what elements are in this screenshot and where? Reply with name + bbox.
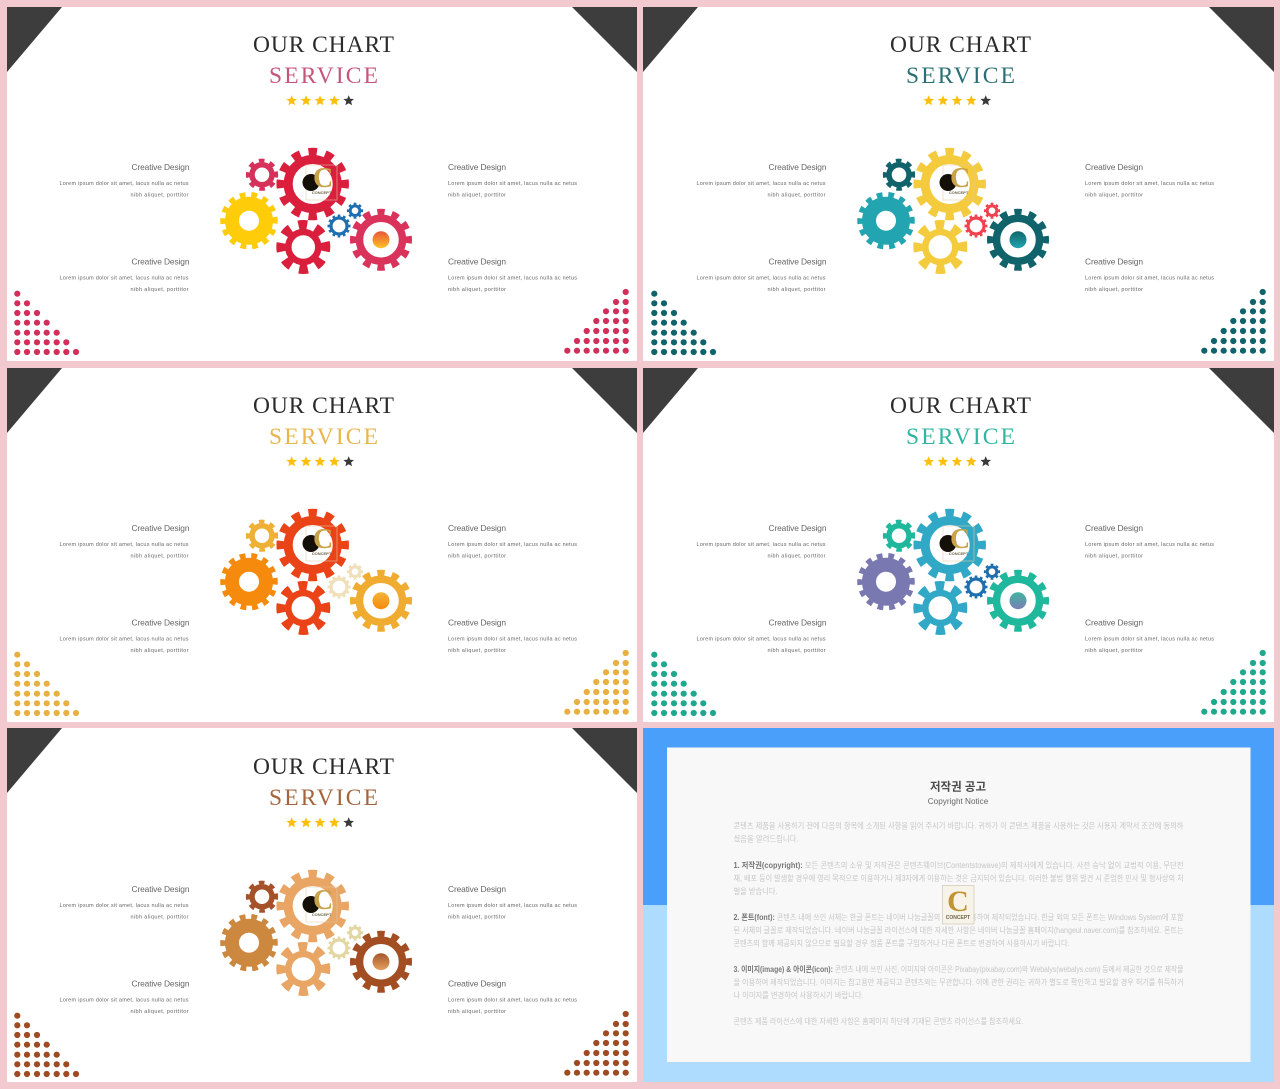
text block top right: nibh aliquet, porttitor [1085, 554, 1143, 560]
panel: orange service slide [7, 368, 637, 722]
text block bottom left: Lorem ipsum dolor sit amet, lacus nulla ac netus [60, 636, 189, 642]
text block top right [1085, 523, 1214, 560]
title: OUR CHART [890, 393, 1031, 419]
text block bottom left: nibh aliquet, porttitor [768, 287, 826, 293]
text block bottom left [60, 256, 190, 293]
corner triangle left [643, 7, 698, 72]
text block bottom right: nibh aliquet, porttitor [448, 1009, 506, 1015]
text block bottom right: Lorem ipsum dolor sit amet, lacus nulla ac netus [448, 998, 577, 1004]
paragraph 2 font [734, 912, 1184, 948]
text block bottom right: nibh aliquet, porttitor [448, 648, 506, 654]
text block bottom right [448, 978, 577, 1015]
panel: teal service slide [643, 7, 1274, 361]
dot triangle right [564, 1011, 629, 1076]
panel: aqua service slide [643, 368, 1274, 722]
paragraph 1 copyright [734, 860, 1184, 896]
corner triangle left [7, 7, 62, 72]
text block bottom right: Creative Design [448, 256, 506, 266]
text block bottom left [696, 256, 827, 293]
text block top right: Creative Design [1085, 162, 1143, 172]
text block bottom right [448, 256, 577, 293]
text block top right: Creative Design [448, 162, 506, 172]
corner triangle right [572, 7, 637, 72]
subtitle: SERVICE [269, 63, 378, 89]
text block bottom right: Creative Design [1085, 618, 1143, 628]
text block bottom right [1085, 618, 1214, 654]
corner triangle right [572, 368, 637, 433]
notice heading: 저작권 공고 [930, 780, 986, 794]
text block top left: Lorem ipsum dolor sit amet, lacus nulla ac netus [696, 181, 826, 187]
watermark logo [942, 885, 974, 924]
text block bottom left: nibh aliquet, porttitor [768, 648, 826, 654]
text block top left: nibh aliquet, porttitor [768, 554, 826, 560]
text block bottom left: Creative Design [132, 256, 190, 266]
text block top left: Creative Design [132, 884, 190, 894]
text block bottom left: Lorem ipsum dolor sit amet, lacus nulla ac netus [60, 276, 189, 282]
text block top left: Creative Design [768, 162, 827, 172]
star rating [923, 456, 991, 466]
corner triangle right [1209, 7, 1274, 72]
title: OUR CHART [253, 754, 394, 780]
text block bottom left [60, 978, 190, 1015]
text block bottom right: Lorem ipsum dolor sit amet, lacus nulla ac netus [448, 276, 577, 282]
text block top left: Lorem ipsum dolor sit amet, lacus nulla ac netus [696, 542, 826, 548]
text block top right: Lorem ipsum dolor sit amet, lacus nulla ac netus [448, 181, 577, 187]
title: OUR CHART [253, 393, 394, 419]
text block top left: nibh aliquet, porttitor [130, 914, 189, 920]
notice card [667, 748, 1250, 1062]
text block bottom left: Creative Design [132, 618, 190, 628]
paragraph 3 image and icon: 을 이용하여 제작되었습니다. 이미지는 참고용만 제공되고 콘텐츠와는 무관합니다. 이에 관한 권리는 귀하가 별도로 확인하고 필요할 경우 허가를 취득하거 [734, 977, 1184, 987]
dot triangle left [651, 652, 716, 716]
gear cluster [860, 512, 1046, 630]
paragraph 2 font: 콘텐츠의 함께 제공되지 않으므로 필요할 경우 정품 폰트를 구입하거나 다른 폰트로 변경하여 사용하시기 바랍니다. [734, 938, 1070, 948]
paragraph 3 image and icon [734, 964, 1184, 1000]
text block top right [448, 884, 577, 920]
panel: red service slide [7, 7, 637, 361]
light blue background bottom [643, 905, 1274, 1082]
corner triangle right [572, 728, 637, 793]
text block top left [696, 162, 827, 198]
text block top right: Lorem ipsum dolor sit amet, lacus nulla ac netus [1085, 542, 1214, 548]
text block top left: Creative Design [768, 523, 827, 533]
text block bottom left: Lorem ipsum dolor sit amet, lacus nulla ac netus [696, 636, 826, 642]
dot triangle right [1201, 289, 1266, 354]
text block bottom left: Creative Design [768, 618, 827, 628]
gear cluster [223, 874, 409, 992]
dot triangle left [14, 291, 79, 355]
blue background top [643, 728, 1274, 905]
text block top left: Creative Design [132, 162, 190, 172]
paragraph 1 copyright: 1. 저작권(copyright): 모든 콘텐츠의 소유 및 저작권은 콘텐츠웨이브(Contentstowave)의 제작사에게 있습니다. 사전 승낙 없이 교법적 이용, 무단전 [734, 860, 1184, 870]
text block bottom left: Lorem ipsum dolor sit amet, lacus nulla ac netus [60, 998, 189, 1004]
text block top left [696, 523, 827, 560]
paragraph 1 copyright: 재, 배포 등이 발생할 경우에 영리 목적으로 이용하거나 제3자에게 이용하는 것은 금지되어 있습니다. 이러한 불법 행위 발견 시 준엄한 민사 및 형사상의 처 [734, 873, 1184, 883]
text block top left: Lorem ipsum dolor sit amet, lacus nulla ac netus [60, 542, 189, 548]
text block bottom left: Creative Design [132, 978, 190, 988]
text block top right: Creative Design [1085, 523, 1143, 533]
text block bottom right: nibh aliquet, porttitor [448, 287, 506, 293]
text block top right: nibh aliquet, porttitor [448, 914, 506, 920]
dot triangle left [14, 652, 79, 716]
text block bottom right: Creative Design [1085, 256, 1143, 266]
dot triangle right [1201, 650, 1266, 715]
text block top right: Creative Design [448, 523, 506, 533]
text block bottom right: Lorem ipsum dolor sit amet, lacus nulla ac netus [1085, 636, 1214, 642]
gear cluster [223, 152, 409, 270]
closing line: 콘텐츠 제품 라이선스에 대한 자세한 사항은 홈페이지 하단에 기재된 콘텐츠 라이선스를 참조하세요. [734, 1016, 1024, 1026]
text block top left [60, 523, 190, 560]
watermark logo: CONCEPT [946, 915, 970, 921]
intro paragraph [734, 820, 1184, 844]
text block top right: nibh aliquet, porttitor [1085, 192, 1143, 198]
text block bottom right: nibh aliquet, porttitor [1085, 287, 1143, 293]
text block top right: nibh aliquet, porttitor [448, 192, 506, 198]
text block bottom right: Lorem ipsum dolor sit amet, lacus nulla ac netus [448, 636, 577, 642]
panel: copyright notice [643, 728, 1274, 1082]
text block top right: Lorem ipsum dolor sit amet, lacus nulla ac netus [1085, 181, 1214, 187]
paragraph 3 image and icon: 나 이미지를 변경하여 사용하시기 바랍니다. [734, 990, 864, 1000]
text block top left [60, 884, 190, 920]
paragraph 1 copyright: 벌을 받습니다. [734, 886, 778, 896]
star rating [923, 95, 991, 105]
text block bottom right [1085, 256, 1214, 293]
dot triangle left [651, 291, 716, 355]
text block top left: nibh aliquet, porttitor [130, 554, 189, 560]
intro paragraph: 셨음을 알려드립니다. [734, 834, 798, 844]
intro paragraph: 콘텐츠 제품을 사용하기 전에 다음의 항목에 소개된 사항을 읽어 주시기 바랍니다. 귀하가 이 콘텐츠 제품을 사용하는 것은 사용자 계약서 조건에 동의하 [734, 820, 1184, 830]
dot triangle right [564, 289, 629, 354]
corner triangle left [7, 368, 62, 433]
gear cluster [223, 512, 409, 630]
text block bottom left: nibh aliquet, porttitor [130, 648, 189, 654]
text block top left [60, 162, 190, 198]
text block top right [448, 162, 577, 198]
title: OUR CHART [253, 32, 394, 58]
text block top right [448, 523, 577, 560]
text block bottom right: nibh aliquet, porttitor [1085, 648, 1143, 654]
dot triangle left [14, 1013, 79, 1077]
gear cluster [860, 152, 1046, 270]
subtitle: SERVICE [906, 63, 1015, 89]
text block bottom left: Creative Design [768, 256, 827, 266]
subtitle: SERVICE [269, 424, 378, 450]
text block top right: Lorem ipsum dolor sit amet, lacus nulla ac netus [448, 903, 577, 909]
text block bottom right: Lorem ipsum dolor sit amet, lacus nulla ac netus [1085, 276, 1214, 282]
text block bottom left [60, 618, 190, 654]
paragraph 2 font: 2. 폰트(font): 콘텐츠 내에 쓰인 서체는 한글 폰트는 네이버 나눔글꼴의 서체를 사용하여 제작되었습니다. 한글 외의 모든 폰트는 Windows System에 포함 [734, 912, 1184, 922]
text block top right: Creative Design [448, 884, 506, 894]
text block top left: nibh aliquet, porttitor [768, 192, 826, 198]
text block top left: Lorem ipsum dolor sit amet, lacus nulla ac netus [60, 181, 189, 187]
text block bottom right: Creative Design [448, 618, 506, 628]
paragraph 3 image and icon: 3. 이미지(image) & 아이콘(icon): 콘텐츠 내에 쓰인 사진, 이미지와 아이콘은 Pixabay(pixabay.com)와 Webalys(webalys.com) 등에서 제공한 것으로 제작물 [734, 964, 1184, 974]
paragraph 2 font: 된 서체의 글꼴로 제작되었습니다. 네이버 나눔글꼴 라이선스에 대한 자세한 사항은 네이버 나눔글꼴 홈페이지(hangeul.naver.com)를 참조하세요. 폰트는 [734, 925, 1184, 935]
text block top left: Creative Design [132, 523, 190, 533]
text block bottom left: nibh aliquet, porttitor [130, 287, 189, 293]
star rating [286, 456, 354, 466]
text block top right [1085, 162, 1214, 198]
star rating [286, 817, 354, 827]
dot triangle right [564, 650, 629, 715]
text block bottom left: nibh aliquet, porttitor [130, 1009, 189, 1015]
notice subheading: Copyright Notice [928, 797, 989, 806]
corner triangle left [643, 368, 698, 433]
text block top right: Lorem ipsum dolor sit amet, lacus nulla ac netus [448, 542, 577, 548]
text block bottom left [696, 618, 827, 654]
text block bottom right [448, 618, 577, 654]
text block bottom right: Creative Design [448, 978, 506, 988]
text block top right: nibh aliquet, porttitor [448, 554, 506, 560]
text block bottom left: Lorem ipsum dolor sit amet, lacus nulla ac netus [696, 276, 826, 282]
watermark logo: C [947, 885, 969, 918]
subtitle: SERVICE [906, 424, 1015, 450]
corner triangle right [1209, 368, 1274, 433]
corner triangle left [7, 728, 62, 793]
subtitle: SERVICE [269, 785, 378, 811]
panel: brown service slide [7, 728, 637, 1082]
star rating [286, 95, 354, 105]
title: OUR CHART [890, 32, 1031, 58]
text block top left: Lorem ipsum dolor sit amet, lacus nulla ac netus [60, 903, 189, 909]
text block top left: nibh aliquet, porttitor [130, 192, 189, 198]
